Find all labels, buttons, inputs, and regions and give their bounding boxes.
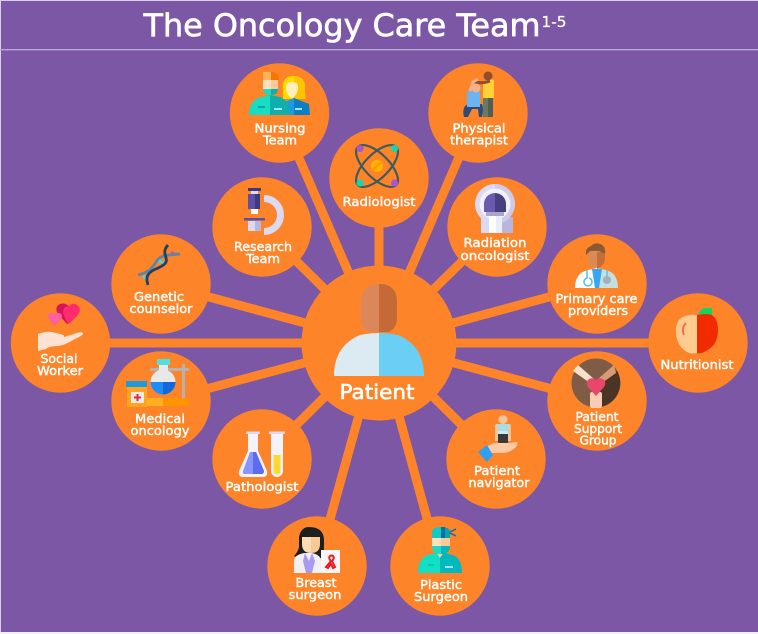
icon: microscope [244,188,280,232]
label [130,289,193,316]
node: breast surgeon [267,516,367,616]
label: Social [40,351,78,366]
icon: person in hand [478,415,518,462]
node: patient support group [547,351,647,451]
label: therapist [450,132,508,148]
node: research team [212,177,312,277]
label: Plastic [420,577,462,592]
node: plastic surgeon [390,516,490,616]
icon: DNA [138,245,180,285]
icon: therapist with patient [463,72,494,117]
label: Breast [296,575,337,590]
label: Worker [37,363,84,378]
label [254,120,306,148]
icon: MRI scanner [475,184,515,233]
label: Team [245,251,280,266]
node: medical oncology [111,351,211,451]
icon: atom [349,138,405,194]
label: surgeon [288,587,342,602]
label [234,239,292,266]
node: nutritionist [648,293,748,393]
icon: doctor [575,243,618,288]
label: Surgeon [414,589,468,604]
label: oncologist [460,248,530,263]
label: navigator [468,475,530,490]
icon: nurses [249,72,310,115]
label: Nursing [254,120,306,136]
label: Genetic [134,289,184,304]
title: The Oncology Care Team [142,8,540,44]
icon: hearts in hand [38,304,83,351]
label: Patient [576,409,619,424]
node: social worker [11,293,110,393]
label: Team [262,132,297,148]
node: radiation oncologist [447,177,547,277]
label [288,575,342,602]
label: Radiation [464,235,526,250]
node: primary care providers [547,234,647,334]
icon: surgeon with cap and mask [418,527,462,573]
label [37,351,84,378]
label [450,120,508,148]
label: Pathologist [226,479,299,494]
title: 1-5 [542,13,566,31]
node: radiologist [329,128,429,228]
icon: lab flask and medicine [126,359,189,407]
label: Research [234,239,292,254]
node: physical therapist [428,63,528,163]
label: Physical [452,120,506,136]
icon: apple [676,306,718,354]
node: patient center [302,266,456,420]
label: oncology [130,423,190,438]
label: Medical [135,411,185,426]
node: nursing team [230,63,329,163]
label: Patient [474,463,520,478]
label [574,409,622,448]
label [468,463,530,490]
node: patient navigator [446,409,546,509]
label: Primary care [556,291,638,306]
label [556,291,638,318]
label: Nutritionist [660,357,734,372]
icon: hands and heart [572,358,620,408]
label: Support [574,421,622,436]
label [130,411,190,438]
connector spokes [60,113,698,566]
icon: surgeon with ribbon [294,527,340,573]
label: providers [568,303,628,318]
label: Radiologist [342,194,416,209]
node: pathologist [212,409,312,509]
label [460,235,530,263]
label [414,577,468,604]
icon: flask and test tube [239,432,285,477]
label: Group [580,432,617,448]
label: counselor [130,301,193,316]
node: genetic counselor [111,234,211,334]
icon: patient figure [334,284,424,376]
label: Patient [340,380,415,404]
